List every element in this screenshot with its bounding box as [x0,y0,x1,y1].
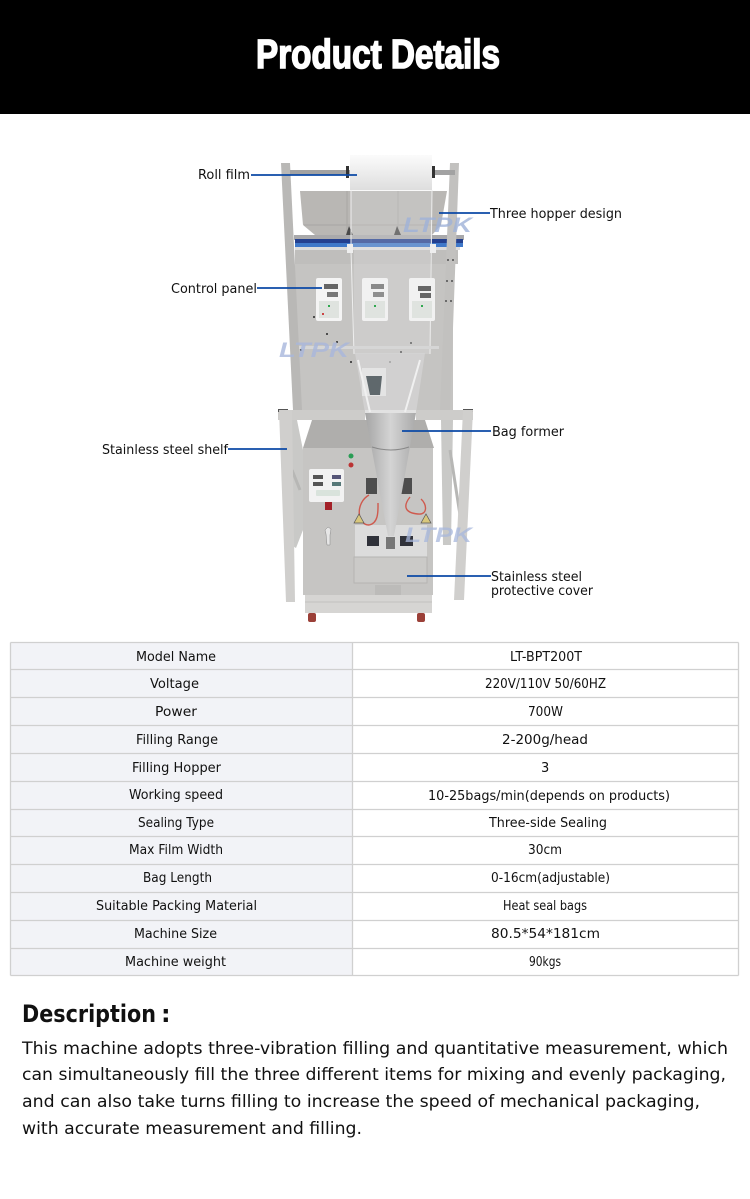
row: bag length: Bag Length [143,871,212,886]
row: bag length: 0-16cm(adjustable) [491,871,610,886]
callout: three hopper design: Three hopper design [489,207,622,222]
row: power: 700W [528,705,563,720]
frame uprights [281,163,302,410]
callout: stainless steel protective cover: Stainless steel [491,570,582,585]
callout: bag former: Bag former [492,425,565,440]
callout: control panel: Control panel [171,282,257,297]
upper body [295,263,453,410]
indicator lights [348,454,354,458]
row: power: Power [155,705,198,720]
row: model name [136,650,582,665]
lower cabinet [303,448,433,595]
row: bag length [143,871,610,886]
description text [21,1039,728,1139]
row: filling hopper: 3 [541,761,549,776]
description heading: : [161,1000,171,1028]
row: machine size: 80.5*54*181cm [491,927,600,942]
lower control panel [309,469,344,502]
row: machine size [134,927,600,942]
discharge chute [375,585,401,601]
sealing jaws [366,478,412,494]
watermark 2: LTPK [279,339,351,362]
row: power [155,705,563,720]
watermark 3: LTPK [405,524,474,547]
row: model name: Model Name [136,650,216,665]
row: working speed: Working speed [129,788,223,803]
film funnel [355,353,425,413]
lower cabinet top [303,420,434,448]
watermark 1: LTPK [403,214,474,237]
row: suitable packing material: Heat seal bags [503,899,587,914]
title: Product Details [256,31,500,77]
machine illustration [278,155,474,622]
row: sealing type: Sealing Type [138,816,214,831]
row: voltage: 220V/110V 50/60HZ [485,677,606,692]
row: machine weight: Machine weight [125,955,226,970]
description text: with accurate measurement and filling. [22,1119,362,1139]
row: suitable packing material: Suitable Packing Material [96,899,257,914]
row: filling range: 2-200g/head [502,733,588,748]
film clamps [347,244,353,253]
warning signs [354,514,431,523]
row: filling hopper [132,761,549,776]
film strip [351,190,432,250]
stainless steel shelf [278,409,473,602]
title banner [0,0,750,114]
callout: stainless steel protective cover [407,570,594,599]
row: filling range: Filling Range [136,733,218,748]
row: filling range [136,733,588,748]
callout: roll film: Roll film [198,168,250,183]
bag former cone [365,413,416,536]
callout: stainless steel shelf: Stainless steel shelf [102,443,228,458]
description text: This machine adopts three-vibration filling and quantitative measurement, which [21,1039,728,1059]
description heading: Description [22,1000,156,1028]
row: sealing type: Three-side Sealing [488,816,607,831]
film roll [350,155,432,190]
row: voltage [150,677,606,692]
row: working speed [129,788,670,804]
row: machine weight: 90kgs [529,955,561,970]
protective cover [354,557,427,583]
screw dots [300,316,433,363]
wheels [308,613,316,622]
row: max film width: 30cm [528,843,562,858]
control panel 1 [316,278,342,321]
description text: can simultaneously fill the three different items for mixing and evenly packaging, [22,1065,726,1085]
handle [325,527,331,545]
row: max film width: Max Film Width [129,843,223,858]
control panel 2 [362,278,388,321]
specification table [10,642,738,976]
row: machine weight [125,955,561,970]
blue bar [295,239,463,245]
row: sealing type [138,816,607,831]
row: model name: LT-BPT200T [510,650,582,665]
row: machine size: Machine Size [134,927,217,942]
row: filling hopper: Filling Hopper [132,761,222,776]
description text: and can also take turns filling to increase the speed of mechanical packaging, [22,1092,700,1112]
base plate [305,595,432,613]
hoppers [300,191,447,235]
power switch [325,502,332,510]
row: working speed: 10-25bags/min(depends on products) [428,789,670,804]
control panel 3 [409,278,435,321]
row: max film width [129,843,562,858]
roller [290,170,455,175]
row: voltage: Voltage [150,677,199,692]
shelf rear legs [290,420,303,548]
callout: stainless steel protective cover: protective cover [491,584,594,599]
row: suitable packing material [96,899,587,914]
